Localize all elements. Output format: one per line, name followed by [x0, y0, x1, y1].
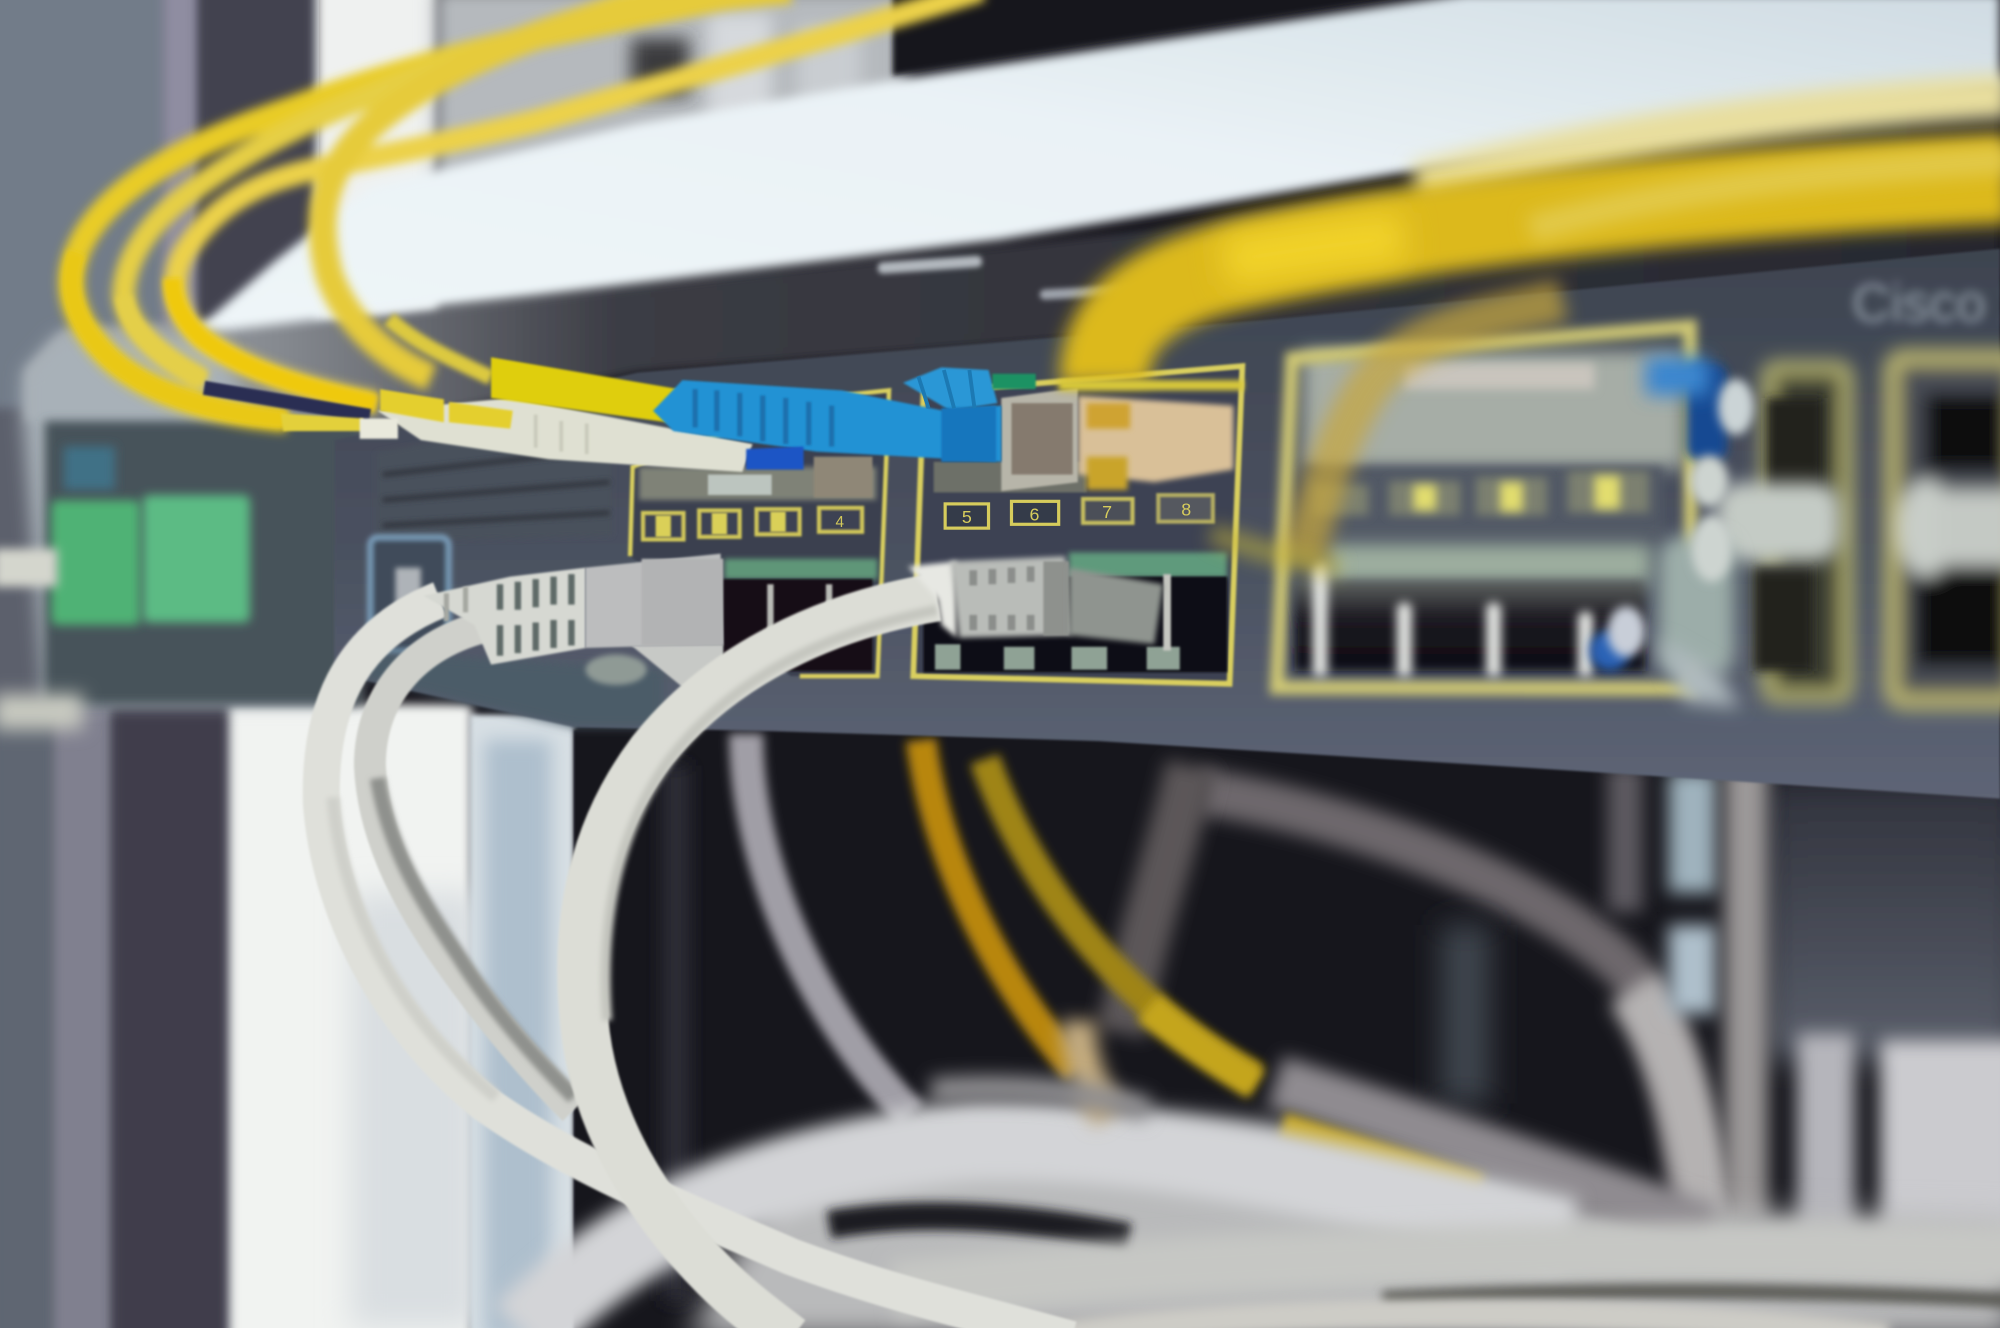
SFP module [1001, 388, 1078, 491]
blue connector [1686, 364, 1727, 461]
lavender cable [746, 734, 912, 1116]
left device with green terminal blocks [0, 334, 361, 730]
icon: green connector left [51, 500, 140, 625]
out-of-focus yellow fibre bundle, upper right [1059, 96, 2000, 569]
port pins [935, 644, 1180, 670]
port group 1 [630, 390, 889, 676]
port group 4 (far right, out of focus) [1892, 357, 2000, 702]
status LEDs [643, 508, 862, 540]
pale blue strip [1674, 772, 1712, 893]
short yellow tubes [281, 413, 364, 431]
grey ethernet cable, inner left loop [370, 625, 574, 1110]
shelf: pale metal band above the switch [26, 0, 2000, 427]
vertical cable [1729, 765, 1763, 1225]
metal cages [639, 467, 876, 500]
blurred white cable bundle, bottom [523, 1021, 2000, 1328]
third strand, in focus [172, 278, 376, 403]
gold connector [1078, 395, 1233, 482]
icon: green connector right [143, 495, 250, 623]
second strand, in focus [124, 296, 204, 380]
LEDs with port numbers: 6 [1029, 504, 1039, 524]
white boots [378, 398, 753, 472]
LEDs with port numbers: 5 [962, 507, 972, 527]
blurred cables below the switch [746, 734, 2000, 1257]
LEDs with port numbers: 7 [1102, 502, 1112, 522]
yellow fibres below [921, 740, 1078, 1072]
ethernet RJ45 plug, centre [908, 556, 1163, 644]
yellow fibre cables, foreground loop [71, 0, 982, 420]
console port [370, 537, 449, 652]
right port cage [1768, 367, 1847, 697]
LEDs with port numbers [945, 495, 1213, 528]
yellow boot [491, 357, 679, 424]
metal cage [934, 462, 1087, 492]
blue LC connectors [653, 367, 1036, 469]
LEDs with port numbers: 8 [1181, 499, 1191, 519]
outer strand, in focus [71, 253, 287, 420]
right wall [1765, 778, 2000, 1059]
ethernet RJ45 plug, left [423, 554, 723, 690]
grey arch cable [1199, 791, 1696, 1212]
grey ethernet cable centre loop [582, 597, 938, 1328]
port group 3 (out of focus) [1277, 327, 1847, 708]
dark sleeve [204, 388, 370, 416]
port group 1: 4 [835, 514, 844, 531]
fibre LC connector boots [281, 357, 753, 472]
port group 2 [913, 366, 1242, 684]
connector strand [389, 319, 491, 378]
strands, soft full length [71, 0, 982, 420]
grey ethernet cable, rear left loop [321, 600, 1071, 1328]
switch front panel [334, 249, 2000, 799]
white blocks [1797, 1033, 1855, 1250]
